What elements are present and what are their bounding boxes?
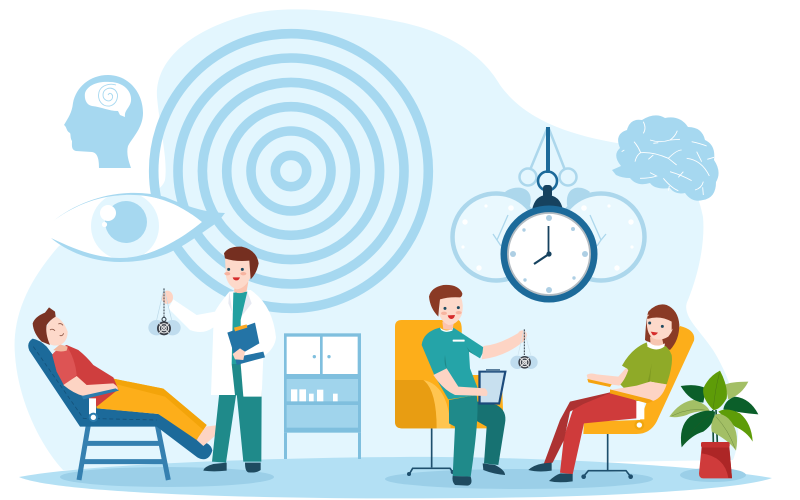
leaves [669, 371, 758, 451]
face [647, 314, 674, 340]
main watch [504, 127, 594, 299]
therapist seated with pendulum [422, 285, 527, 486]
far leg [460, 398, 505, 465]
chair strut [636, 399, 644, 419]
shirt [619, 342, 672, 401]
floor [19, 457, 772, 498]
shoes [452, 463, 505, 486]
icon: head with spiral [64, 75, 143, 168]
neck [650, 337, 664, 347]
shirt [52, 345, 118, 407]
potted plant [669, 371, 758, 478]
stems [713, 410, 717, 443]
far arm [587, 368, 628, 386]
woman's chair [581, 326, 694, 479]
face [225, 258, 252, 289]
pendulum held by doctor [148, 288, 181, 335]
arm [63, 376, 118, 396]
floor shadows [60, 467, 746, 489]
near leg [449, 395, 478, 477]
foot [197, 424, 224, 446]
lab coat [168, 290, 276, 397]
doctor with pendulum [162, 247, 276, 473]
trousers [212, 387, 262, 463]
trousers [96, 379, 207, 440]
shoes [528, 463, 573, 482]
pocket watch pendulum [452, 127, 644, 299]
shirt [422, 328, 485, 399]
face [439, 297, 463, 325]
clipboard [227, 323, 259, 357]
collar [647, 341, 665, 349]
armrest [82, 388, 119, 399]
hair [33, 307, 56, 345]
shoes [203, 463, 261, 473]
pendulum held by therapist [510, 329, 538, 369]
woman patient seated [528, 304, 679, 482]
hand [162, 291, 173, 304]
pot [699, 442, 732, 478]
ghost watches [452, 129, 644, 280]
chair [28, 339, 212, 459]
neck [234, 282, 248, 293]
icon: brain [612, 115, 719, 201]
chair legs [79, 425, 168, 480]
near arm [610, 382, 667, 402]
forearm [433, 368, 488, 396]
teal shirt [232, 292, 247, 365]
hypnotic concentric rings [154, 34, 428, 308]
face [46, 317, 68, 346]
neck [53, 344, 68, 352]
arm [482, 333, 526, 359]
icon: eye [51, 192, 225, 262]
fringe [647, 307, 676, 330]
hair [429, 285, 462, 317]
patient reclining in chair [28, 307, 224, 480]
medicine cabinet [284, 333, 361, 459]
clipboard [478, 371, 507, 405]
neck [442, 321, 454, 330]
hair [224, 247, 259, 279]
therapist's armchair [395, 320, 503, 476]
book [587, 379, 653, 403]
hair back [645, 304, 679, 350]
trousers [560, 392, 637, 474]
collar [440, 328, 453, 332]
